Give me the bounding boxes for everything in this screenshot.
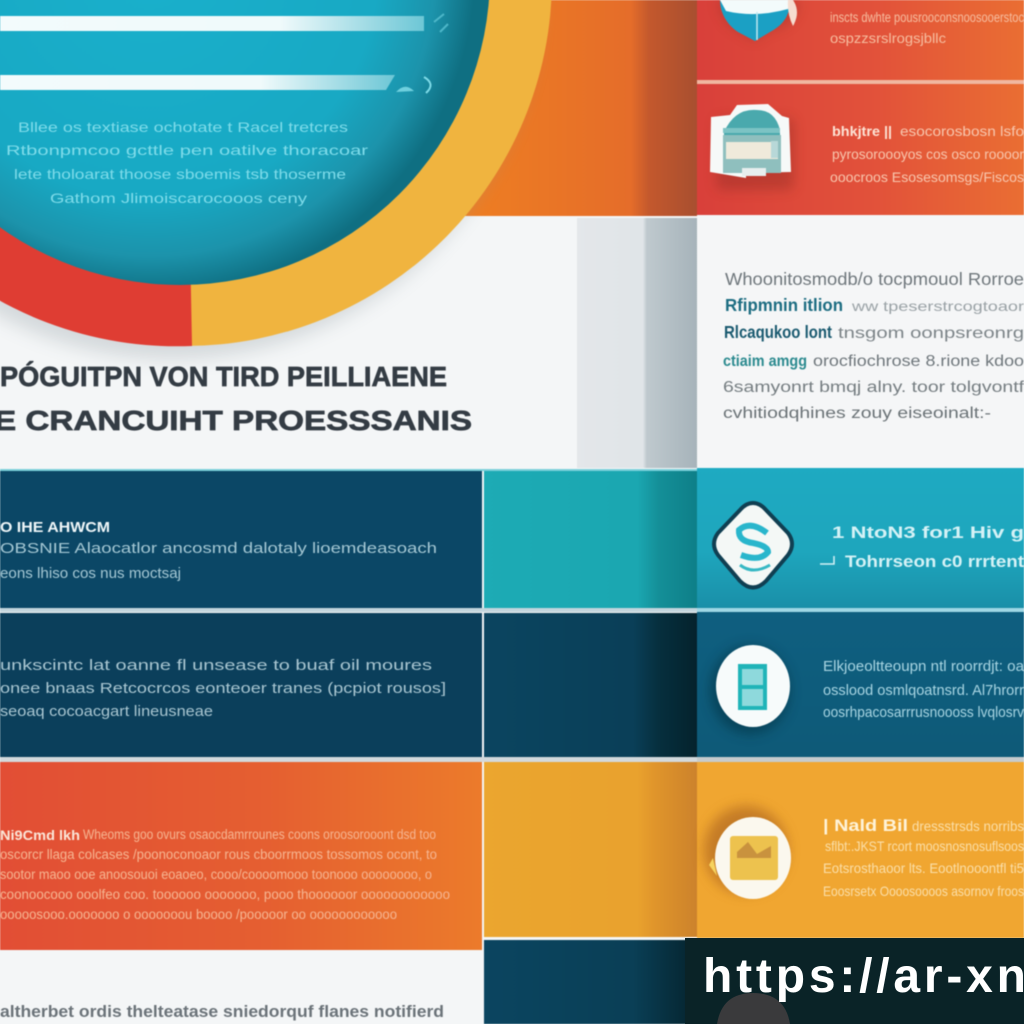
top right body: ospzzsrslrogsjbllc xyxy=(830,31,946,46)
panel: navy row two xyxy=(0,608,697,757)
panel: right yellow row xyxy=(697,757,1024,938)
panel: right white text block xyxy=(697,218,1024,468)
column: yellow row middle xyxy=(484,762,697,937)
second right body: bhkjtre || xyxy=(832,124,892,139)
row two body: seoaq cocoacgart lineusneae xyxy=(0,704,213,720)
main heading: E CRANCUIHT PROESSSANIS xyxy=(0,405,472,436)
circle body text: Bllee os textiase ochotate t Racel tretcres xyxy=(18,119,348,135)
circle graphic xyxy=(0,0,552,359)
navy row text xyxy=(823,658,1024,721)
row one body: OBSNIE Alaocatlor ancosmd dalotaly lioemdeasoach xyxy=(0,541,437,557)
orange row body: sootor maoo ooe anoosouoi eoaoeo, cooo/coooomooo toonooo oooooooo, o xyxy=(0,867,432,882)
teal row text: 1 NtoN3 for1 Hiv g xyxy=(832,523,1024,542)
white block lines: Whoonitosmodb/o tocpmouol Rorroe xyxy=(725,269,1024,289)
panel: second right red xyxy=(697,80,1024,215)
second right body: ooocroos Esosesomsgs/Fiscos xyxy=(830,170,1024,185)
white block lines: tnsgom oonpsreonrg xyxy=(838,325,1024,342)
panel: top orange block xyxy=(460,0,697,216)
panel: navy row one xyxy=(0,469,697,608)
navy row text: osslood osmlqoatnsrd. Al7hrorr xyxy=(823,682,1024,699)
row two body xyxy=(0,658,446,720)
watermark banner xyxy=(685,938,1024,1024)
orange row body: oscorcr llaga colcases /poonoconoaor rous cboorrmoos tossomos ocont, to xyxy=(0,847,437,862)
column: bottom navy block xyxy=(484,940,697,1024)
circle body text: lete tholoarat thoose sboemis tsb thoserme xyxy=(14,166,346,182)
navy row text: Elkjoeoltteoupn ntl roorrdjt: oa xyxy=(823,658,1024,675)
icon: monitor xyxy=(710,104,794,190)
icon: small swirl lower xyxy=(396,77,431,93)
yellow row text: | Nald Bil xyxy=(823,816,908,835)
bar: first heading placeholder xyxy=(0,16,424,31)
row two body: onee bnaas Retcocrcos eonteoer tranes (pcpiot rousos] xyxy=(0,681,446,697)
icon: white badge with yellow card xyxy=(704,806,791,899)
watermark avatar shape xyxy=(717,993,790,1024)
row one title: O IHE AHWCM xyxy=(0,519,110,536)
white block lines: orocfiochrose 8.rione kdoo xyxy=(813,353,1024,370)
panel: orange row xyxy=(0,757,697,950)
teal row text: Tohrrseon c0 rrrtent xyxy=(845,552,1024,571)
main heading xyxy=(0,361,472,436)
row two body: unkscintc lat oanne fl unsease to buaf oil moures xyxy=(0,658,432,674)
orange row body: coonoocooo ooolfeo coo. toooooo ooooooo, pooo thoooooor oooooooooooo xyxy=(0,887,450,902)
white block lines: ww tpeserstrcogtoaor xyxy=(851,298,1024,314)
yellow row text xyxy=(823,816,1024,899)
second right body: esocorosbosn lsfo xyxy=(900,124,1024,139)
main heading: PÓGUITPN VON TIRD PEILLIAENE xyxy=(0,361,447,392)
circle: yellow ring xyxy=(0,0,552,346)
white block lines: Rfipmnin itlion xyxy=(725,295,843,315)
second right body: pyrosoroooyos cos osco roooor xyxy=(832,147,1024,162)
text block: bottom left: altherbet ordis thelteatase sniedorquf flanes notifierd xyxy=(0,1002,444,1021)
teal row text xyxy=(820,523,1024,571)
second right body xyxy=(830,124,1024,185)
circle: teal disc xyxy=(0,0,490,285)
white block lines xyxy=(723,269,1024,422)
circle body text: Rtbonpmcoo gcttle pen oatilve thoracoar xyxy=(6,142,368,158)
orange row title: Ni9Cmd lkh xyxy=(0,827,80,843)
icon: shield xyxy=(718,0,798,41)
orange row body: ooooosooo.ooooooo o ooooooou boooo /pooooor oo oooooooooooo xyxy=(0,907,397,922)
column: teal row middle xyxy=(484,471,697,608)
white block lines: Rlcaqukoo lont xyxy=(724,322,832,342)
circle body text xyxy=(6,119,368,206)
icon: diamond xyxy=(714,503,792,588)
row one body xyxy=(0,541,437,582)
white block lines: cvhitiodqhines zouy eiseoinalt:- xyxy=(723,405,991,422)
circle: red segment xyxy=(0,0,192,346)
orange row body xyxy=(0,827,450,922)
white block lines: 6samyonrt bmqj alny. toor tolgvontf xyxy=(723,379,1024,396)
column: navy row middle xyxy=(484,613,697,757)
top right body xyxy=(830,10,1024,46)
icon: white badge with teal device xyxy=(710,645,790,734)
icon: small swirl upper xyxy=(434,14,448,32)
orange row body: Wheoms goo ovurs osaocdamrrounes coons oroosorooont dsd too xyxy=(83,827,436,842)
panel: right teal row xyxy=(697,468,1024,608)
white block lines: ctiaim amgg xyxy=(723,353,807,370)
panel: top right red xyxy=(697,0,1024,80)
panel: central gray band xyxy=(577,218,697,468)
panel: right navy row xyxy=(697,608,1024,757)
row one body: eons lhiso cos nus moctsaj xyxy=(0,566,181,582)
circle body text: Gathom Jlimoiscarocooos ceny xyxy=(50,190,307,206)
watermark text: https://ar-xn xyxy=(703,950,1024,1003)
bar: second heading placeholder xyxy=(0,75,395,90)
